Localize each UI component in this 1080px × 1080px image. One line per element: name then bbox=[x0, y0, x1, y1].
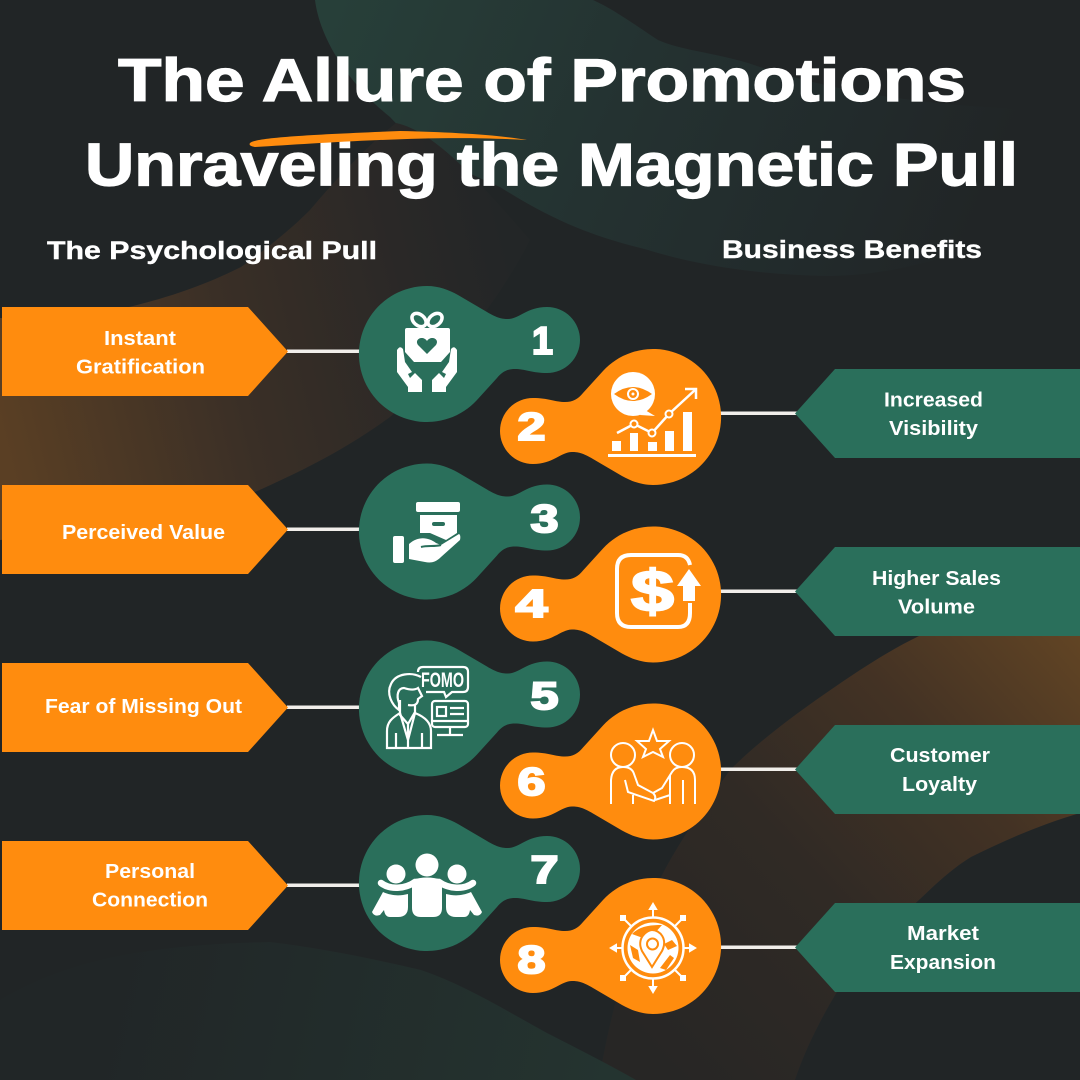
title bbox=[85, 47, 1018, 198]
label: Customer Loyalty: Customer bbox=[890, 744, 990, 767]
icon: globe with pin and arrows bbox=[611, 904, 695, 992]
label: Increased Visibility: Increased bbox=[884, 388, 983, 412]
background shape: green bottom bbox=[0, 942, 636, 1080]
background shape: brown left bbox=[0, 123, 530, 540]
node 4: 4 bbox=[516, 583, 548, 626]
node 2: 2 bbox=[518, 406, 546, 449]
node 5: 5 bbox=[530, 675, 558, 718]
label: Higher Sales Volume: Volume bbox=[898, 596, 975, 618]
label: Instant Gratification: Gratification bbox=[76, 356, 205, 378]
label: Instant Gratification bbox=[2, 307, 288, 396]
label: Fear of Missing Out bbox=[2, 663, 288, 752]
node 6: 6 bbox=[518, 761, 546, 804]
label: Instant Gratification: Instant bbox=[104, 327, 176, 350]
icon: FOMO person and monitor bbox=[387, 667, 468, 748]
icon: gift in hands bbox=[397, 311, 457, 392]
node 4 bbox=[500, 526, 721, 663]
label: Fear of Missing Out: Fear of Missing Out bbox=[45, 695, 242, 718]
brush underline bbox=[250, 131, 527, 147]
label: Higher Sales Volume: Higher Sales bbox=[872, 567, 1001, 590]
label: Market Expansion: Market bbox=[907, 922, 979, 945]
node 6 bbox=[500, 704, 721, 840]
label: Perceived Value bbox=[2, 485, 288, 574]
node 7: 7 bbox=[530, 849, 558, 892]
icon: eye and growth chart bbox=[608, 372, 696, 457]
node 2 bbox=[500, 349, 721, 485]
background shape: green top bbox=[315, 0, 1080, 276]
node 8 bbox=[500, 878, 721, 1014]
node 1: 1 bbox=[532, 320, 553, 363]
label: Market Expansion bbox=[795, 903, 1080, 992]
label: Perceived Value: Perceived Value bbox=[62, 521, 225, 544]
icon: handshake and star bbox=[611, 730, 695, 804]
icon: FOMO person and monitor: FOMO bbox=[421, 669, 464, 692]
heading: The Psychological Pull: The Psychological Pull bbox=[47, 237, 377, 265]
icon: hand holding box bbox=[393, 502, 460, 563]
label: Increased Visibility: Visibility bbox=[889, 417, 979, 440]
connectors right bbox=[720, 412, 797, 949]
node 1 bbox=[359, 286, 580, 422]
node 5 bbox=[359, 640, 580, 776]
title: Unraveling the Magnetic Pull bbox=[85, 132, 1018, 198]
icon: group of three people bbox=[372, 854, 482, 917]
connectors left bbox=[287, 350, 360, 887]
node 3 bbox=[359, 463, 580, 600]
label: Customer Loyalty: Loyalty bbox=[902, 773, 978, 796]
label: Customer Loyalty bbox=[795, 725, 1080, 814]
node 8: 8 bbox=[518, 939, 546, 982]
icon: dollar with arrow up: $ bbox=[631, 559, 674, 624]
heading: Business Benefits: Business Benefits bbox=[722, 236, 982, 264]
label: Personal Connection: Personal bbox=[105, 860, 195, 883]
node 3: 3 bbox=[530, 498, 558, 541]
label: Market Expansion: Expansion bbox=[890, 951, 996, 974]
node 7 bbox=[359, 815, 580, 951]
icon: dollar with arrow up bbox=[617, 555, 701, 627]
label: Increased Visibility bbox=[795, 369, 1080, 458]
label: Personal Connection: Connection bbox=[92, 888, 208, 912]
title: The Allure of Promotions bbox=[118, 47, 966, 114]
label: Higher Sales Volume bbox=[795, 547, 1080, 636]
background shape: brown right bbox=[599, 580, 1080, 1080]
label: Personal Connection bbox=[2, 841, 288, 930]
